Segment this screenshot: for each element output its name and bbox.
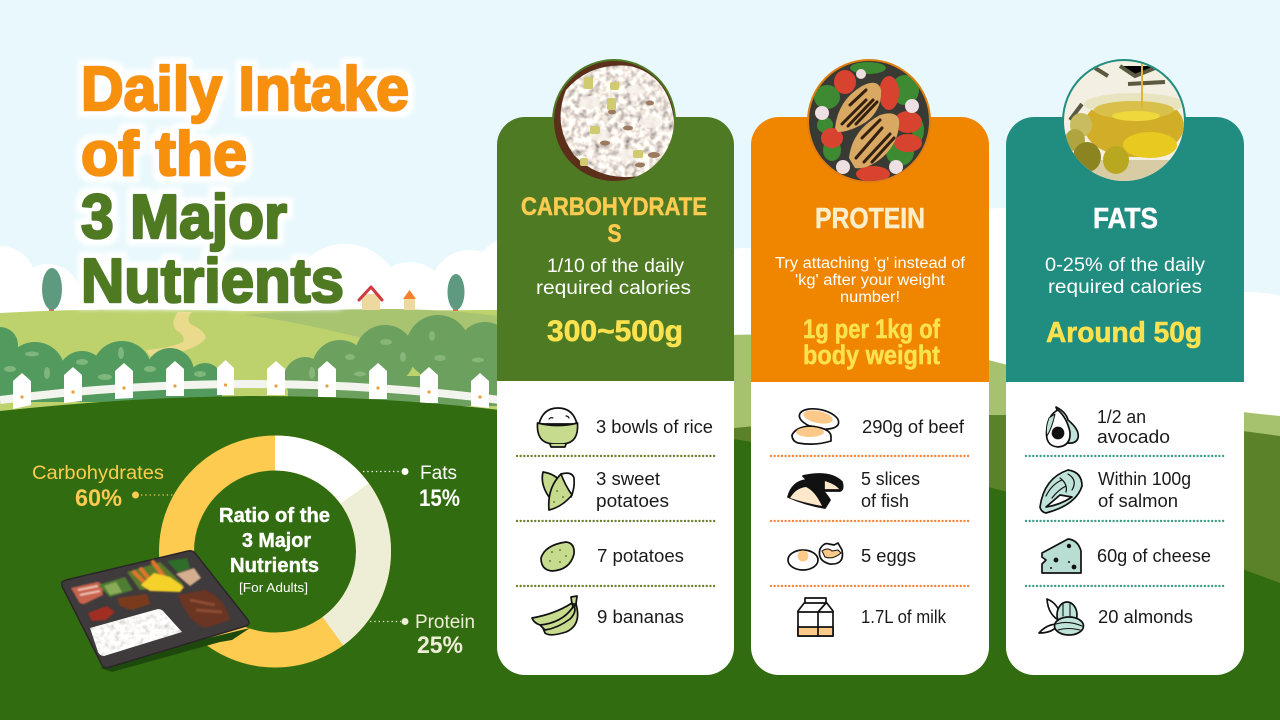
card heading xyxy=(521,193,707,248)
icon: beef xyxy=(792,406,841,444)
item: potatoes xyxy=(541,542,684,571)
item: salmon xyxy=(1040,469,1191,513)
card header xyxy=(751,117,989,382)
item: avocado: 1/2 an xyxy=(1097,407,1146,427)
card description: 0-25% of the daily xyxy=(1045,255,1206,276)
panel: protein xyxy=(751,59,989,675)
icon: cheese xyxy=(1042,539,1081,573)
item: rice xyxy=(537,408,713,447)
item: beef xyxy=(792,406,965,444)
icon: almonds xyxy=(1039,599,1084,635)
item: avocado: avocado xyxy=(1097,427,1170,447)
title xyxy=(81,55,409,316)
title: of the xyxy=(81,120,247,189)
trees and houses xyxy=(42,268,464,311)
icon: sweet potatoes xyxy=(542,472,574,510)
item: avocado xyxy=(1046,407,1170,447)
item: milk xyxy=(798,598,947,636)
item: potatoes: 7 potatoes xyxy=(597,546,684,566)
donut fats slice xyxy=(275,453,355,494)
lunch tray illustration xyxy=(62,551,250,672)
item: fish: 5 slices xyxy=(861,469,920,489)
label: carbohydrates: Carbohydrates xyxy=(32,463,164,484)
photo: chicken salad xyxy=(807,59,931,183)
card description: number! xyxy=(840,289,900,306)
item: salmon: Within 100g xyxy=(1098,469,1191,489)
card description xyxy=(775,255,966,306)
icon: potato xyxy=(541,542,574,571)
card amount: 1g per 1kg of xyxy=(803,314,941,344)
item: eggs xyxy=(788,543,916,570)
card description: 1/10 of the daily xyxy=(547,256,685,277)
card heading: CARBOHYDRATE xyxy=(521,193,707,221)
item: cheese: 60g of cheese xyxy=(1097,546,1211,566)
donut chart xyxy=(32,453,475,659)
label: protein: Protein xyxy=(415,612,475,633)
icon: bananas xyxy=(532,596,578,635)
item: sweet potatoes: potatoes xyxy=(596,491,669,511)
label: carbohydrates: 60% xyxy=(75,485,122,512)
icon: eggs xyxy=(788,543,842,570)
donut carbohydrates slice xyxy=(176,453,374,650)
card description: required calories xyxy=(1048,277,1202,298)
photo: olive oil xyxy=(1060,59,1190,185)
panel: carbohydrates xyxy=(497,59,734,675)
item: almonds xyxy=(1039,599,1193,635)
dividers xyxy=(517,456,715,586)
card body xyxy=(751,117,989,675)
card amount xyxy=(803,314,941,370)
label: protein: 25% xyxy=(417,632,463,659)
ground xyxy=(0,396,1280,720)
card heading: S xyxy=(608,220,622,248)
panel: fats xyxy=(1006,59,1244,675)
item: sweet potatoes: 3 sweet xyxy=(596,469,660,489)
label: carbohydrates xyxy=(32,463,173,512)
title: 3 Major xyxy=(81,183,287,252)
item: rice: 3 bowls of rice xyxy=(596,417,713,437)
item: eggs: 5 eggs xyxy=(861,546,916,566)
donut center label: Ratio of the xyxy=(219,505,330,527)
item: salmon: of salmon xyxy=(1098,491,1178,511)
card amount: 300~500g xyxy=(547,315,683,348)
card body xyxy=(1006,117,1244,675)
dividers xyxy=(771,456,969,586)
card description xyxy=(536,256,691,299)
item: fish xyxy=(788,469,920,511)
dividers xyxy=(1026,456,1224,586)
card heading: PROTEIN xyxy=(815,203,925,235)
icon: salmon steak xyxy=(1040,470,1082,513)
item: milk: 1.7L of milk xyxy=(861,607,947,627)
card heading: FATS xyxy=(1093,203,1158,235)
label: protein xyxy=(370,612,475,659)
label: fats: 15% xyxy=(419,485,460,512)
photo: rice xyxy=(552,59,676,183)
item: bananas: 9 bananas xyxy=(597,607,684,627)
icon: rice bowl xyxy=(537,408,578,447)
card description: Try attaching 'g' instead of xyxy=(775,255,966,272)
item: almonds: 20 almonds xyxy=(1098,607,1193,627)
item: bananas xyxy=(532,596,684,635)
donut center label: [For Adults] xyxy=(239,581,308,595)
icon: fish slices xyxy=(788,474,843,508)
donut protein slice xyxy=(333,494,374,631)
card amount: Around 50g xyxy=(1046,317,1202,349)
card header xyxy=(1006,117,1244,382)
card body xyxy=(497,117,734,675)
donut center label xyxy=(219,505,330,595)
card description: 'kg' after your weight xyxy=(795,272,946,289)
icon: avocado xyxy=(1046,407,1078,447)
item: sweet potatoes xyxy=(542,469,669,511)
icon: milk carton xyxy=(798,598,833,636)
title: Daily Intake xyxy=(81,55,409,124)
item: beef: 290g of beef xyxy=(862,417,965,437)
item: cheese xyxy=(1042,539,1211,573)
label: fats: Fats xyxy=(420,463,457,484)
card description xyxy=(1045,255,1206,298)
donut center label: 3 Major xyxy=(242,530,311,552)
label: fats xyxy=(363,463,460,512)
fence xyxy=(0,360,500,409)
card header xyxy=(497,117,734,381)
item: fish: of fish xyxy=(861,491,909,511)
donut center label: Nutrients xyxy=(230,555,319,577)
card amount: body weight xyxy=(803,340,940,370)
title: Nutrients xyxy=(81,247,344,316)
card description: required calories xyxy=(536,278,691,299)
